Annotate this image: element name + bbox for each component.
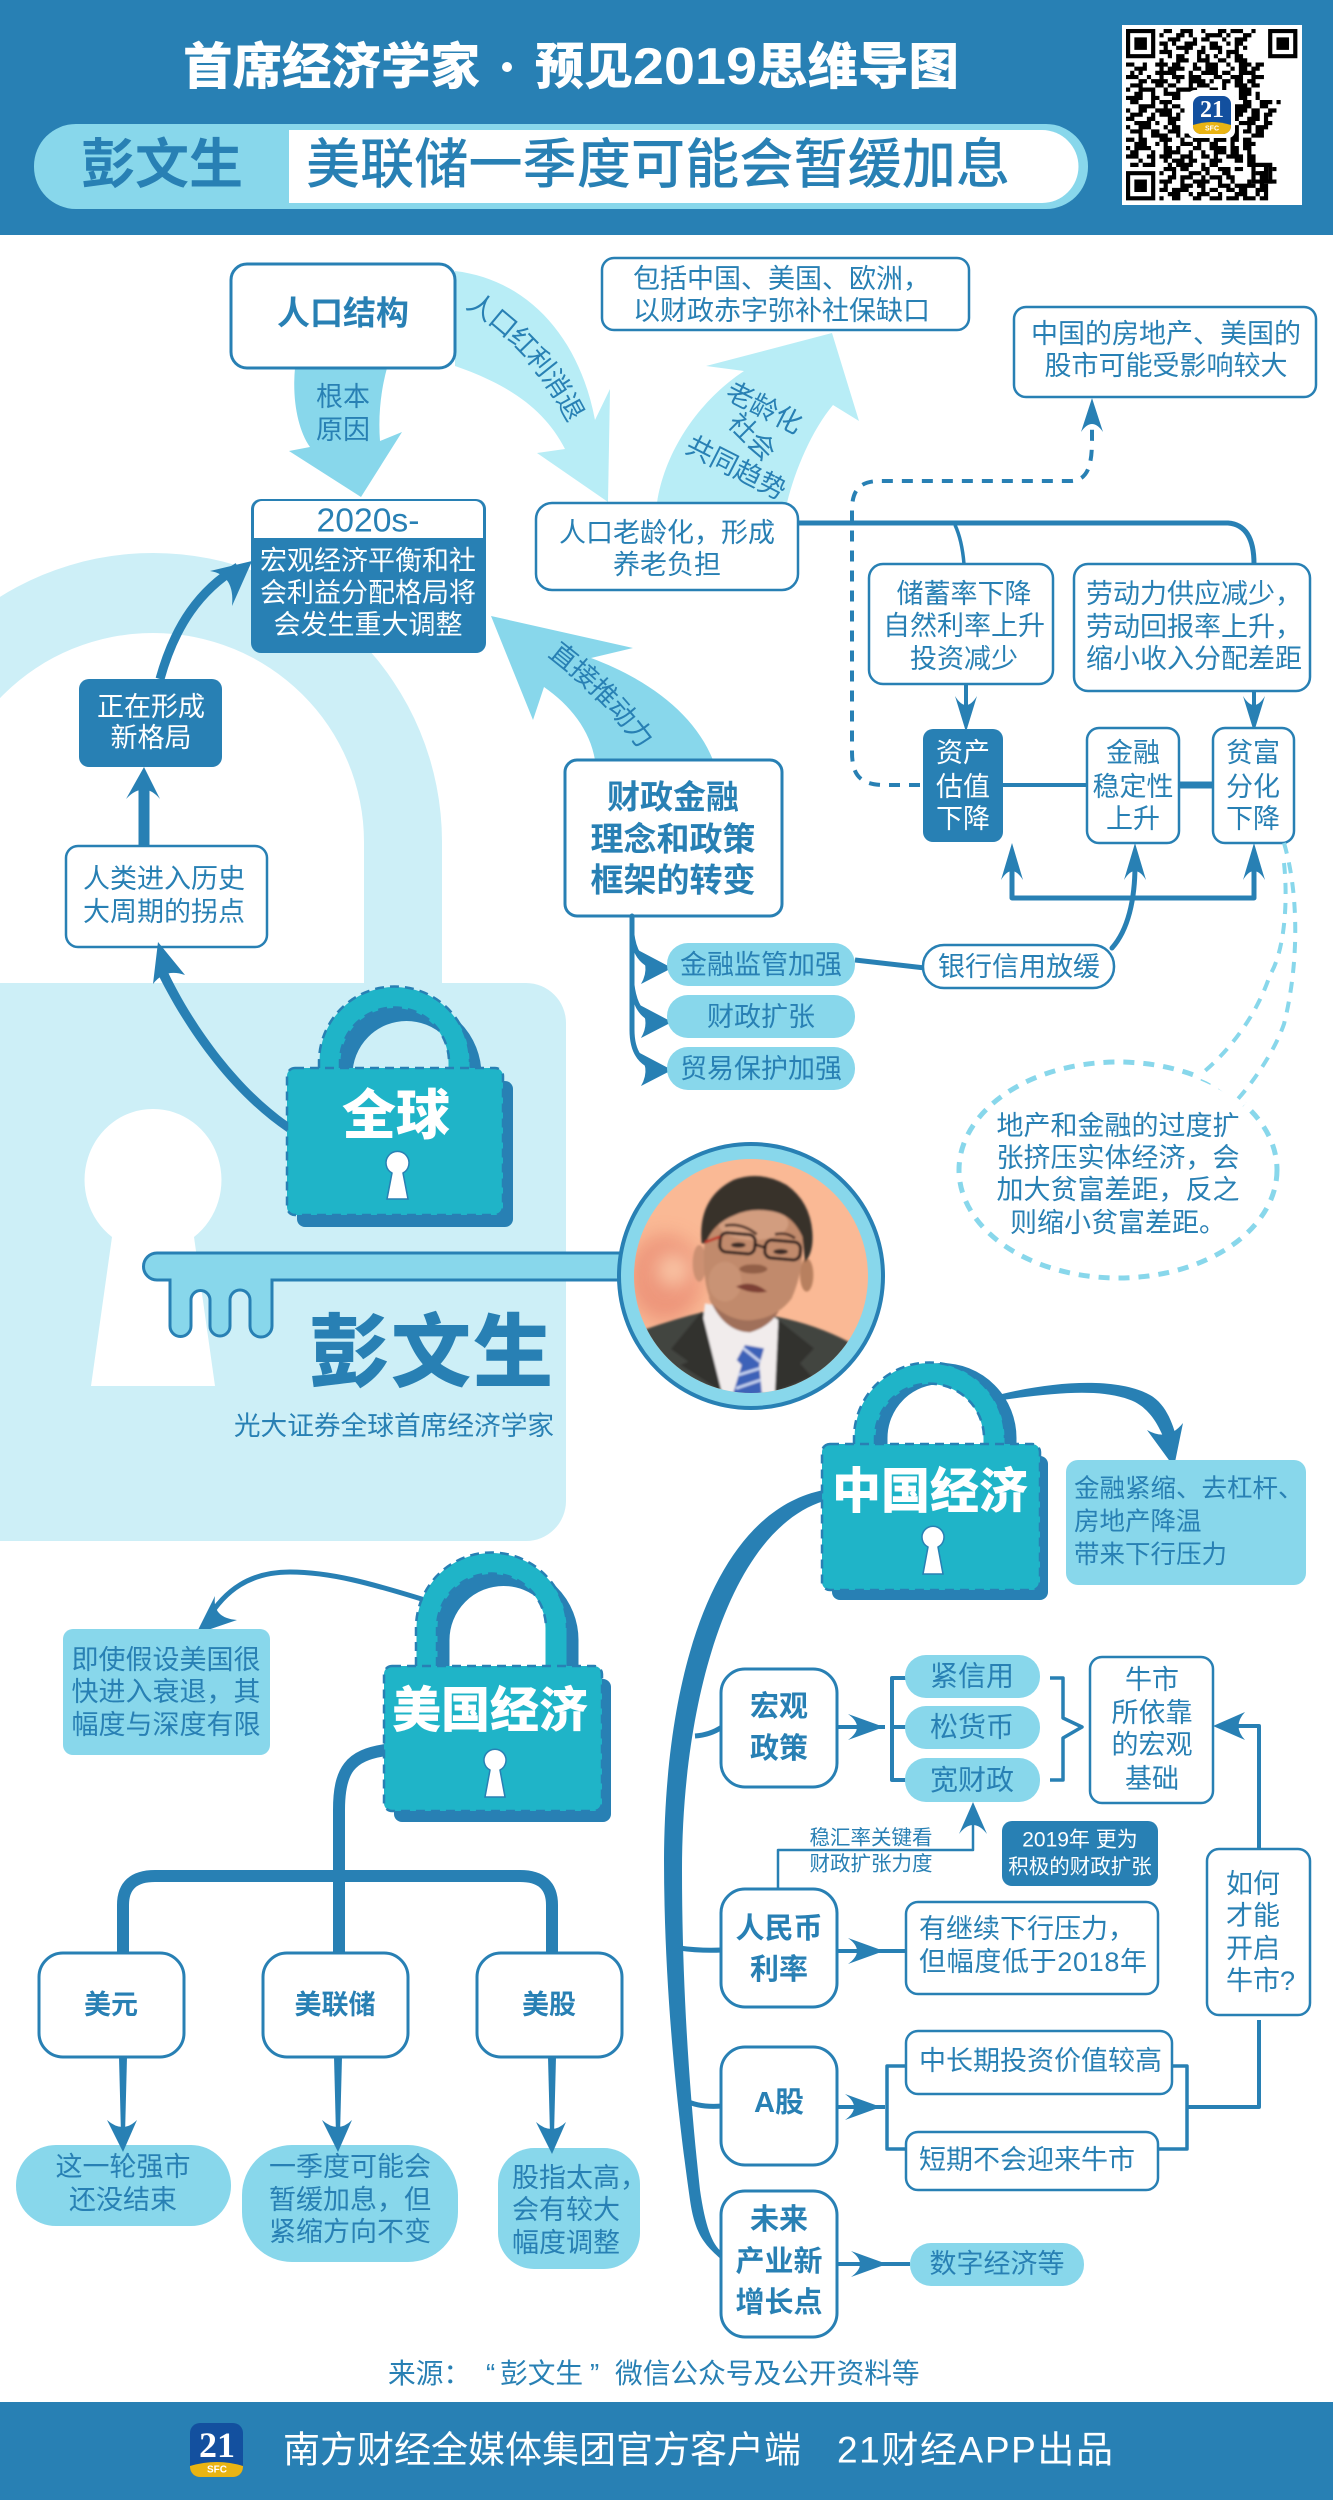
box: macro policy xyxy=(721,1669,837,1787)
box: continued pressure: 有继续下行压力， xyxy=(919,1914,1135,1944)
China trunk curve xyxy=(664,1490,824,2260)
box: population ageing: 人口老龄化，形成 xyxy=(559,518,775,548)
pill: tight credit: 紧信用 xyxy=(930,1660,1014,1692)
box: how to start bull market: 才能 xyxy=(1226,1901,1280,1931)
box: forming new pattern: 新格局 xyxy=(110,723,192,753)
background giant padlock xyxy=(0,553,566,1541)
box: 2019 more active fiscal: 2019年 更为 xyxy=(1022,1828,1138,1852)
source line: 彭文生 xyxy=(500,2358,583,2388)
dashed arrow to housing/stock note xyxy=(852,398,1103,785)
arrows: US boxes to conclusions xyxy=(107,2057,566,2154)
box: macro policy: 宏观 xyxy=(750,1690,808,1723)
policy tree xyxy=(632,916,672,1086)
pill: fiscal expansion: 财政扩张 xyxy=(707,1002,815,1032)
arrow label: ageing common trend xyxy=(681,376,807,506)
box: US dollar: 美元 xyxy=(84,1990,138,2020)
box: future growth: 未来 xyxy=(750,2203,808,2236)
source line: 来源： xyxy=(388,2358,471,2388)
box: China housing, US stocks: 中国的房地产、美国的 xyxy=(1031,319,1301,349)
box: no bull market short term: 短期不会迎来牛市 xyxy=(919,2145,1135,2175)
box: bull market basis xyxy=(1090,1657,1213,1803)
pill: dollar strength xyxy=(16,2145,231,2226)
box: US stocks: 美股 xyxy=(522,1990,576,2020)
box: recession note xyxy=(63,1629,270,1755)
links between outcome boxes xyxy=(1003,783,1213,787)
title xyxy=(183,38,959,96)
arrow: China lock to pressure note xyxy=(1002,1383,1183,1467)
dashed callout: property and finance: 则缩小贫富差距。 xyxy=(1010,1208,1226,1238)
headline pill: 美联储一季度可能会暂缓加息 xyxy=(306,135,1010,195)
box: includes China, US, Europe xyxy=(602,258,969,330)
box: 2020s: 2020s- xyxy=(316,502,420,538)
arrow: demographic dividend fades xyxy=(455,271,610,502)
box: 2019 more active fiscal: 积极的财政扩张 xyxy=(1008,1856,1152,1878)
box: fiscal and financial policy shift: 理念和政策 xyxy=(590,820,756,858)
box: savings rate xyxy=(869,564,1053,684)
pill: dollar strength: 还没结束 xyxy=(69,2185,177,2215)
name: Peng Wensheng: 彭文生 xyxy=(309,1308,553,1398)
box: wealth gap falls: 分化 xyxy=(1226,772,1280,802)
box: financial stability rises: 金融 xyxy=(1106,738,1160,768)
box: bull market basis: 基础 xyxy=(1125,1764,1179,1794)
arrow: global lock to turning point xyxy=(153,942,288,1132)
arrow label: ageing common trend: 社会 xyxy=(722,407,782,467)
box: RMB and rates: 利率 xyxy=(750,1953,808,1986)
job title: 光大证券全球首席经济学家 xyxy=(234,1411,554,1441)
box: asset valuation falls: 估值 xyxy=(936,772,990,802)
pill: tight credit xyxy=(905,1655,1040,1698)
box: wealth gap falls xyxy=(1213,728,1294,843)
box: long-term value xyxy=(906,2031,1172,2094)
box: turning point: 人类进入历史 xyxy=(83,864,245,894)
keyhole xyxy=(386,1151,409,1199)
box: future growth: 增长点 xyxy=(735,2286,823,2319)
box: forming new pattern: 正在形成 xyxy=(97,692,205,722)
arrow label: root cause xyxy=(316,382,370,445)
box: financial stability rises xyxy=(1087,728,1179,843)
box: wealth gap falls: 下降 xyxy=(1226,804,1280,834)
arrow: savings to asset valuation xyxy=(955,684,977,732)
pill: loose money: 松货币 xyxy=(930,1712,1014,1742)
footer logo: 21 xyxy=(199,2425,235,2465)
box: fiscal and financial policy shift: 财政金融 xyxy=(607,778,739,816)
box: bull market basis: 的宏观 xyxy=(1112,1730,1192,1760)
box: asset valuation falls: 资产 xyxy=(936,738,990,768)
box: RMB and rates: 人民币 xyxy=(735,1913,823,1945)
arrow: how to start bull market xyxy=(1187,1712,1259,2107)
title: 首席经济学家 xyxy=(183,39,480,95)
box: labour supply xyxy=(1074,564,1310,691)
arrow: ageing common trend xyxy=(657,333,859,506)
QR code xyxy=(1122,25,1302,205)
pill: US stocks high: 幅度调整 xyxy=(512,2228,620,2258)
padlock: China economy xyxy=(822,1362,1048,1600)
name: Peng Wensheng xyxy=(234,1308,554,1441)
lock label: US economy: 美国经济 xyxy=(392,1684,588,1738)
box: turning point xyxy=(66,846,267,947)
QR centre logo: SFC xyxy=(1205,126,1219,132)
exchange rate note xyxy=(810,1826,932,1876)
box: downward pressure note: 带来下行压力 xyxy=(1074,1541,1227,1569)
box: 2020s: 会发生重大调整 xyxy=(274,610,462,640)
headline pill: 彭文生 xyxy=(81,135,243,195)
pill: Fed pause xyxy=(242,2145,458,2262)
pill: trade protection xyxy=(667,1047,855,1090)
key xyxy=(144,1253,632,1337)
box: 2020s xyxy=(251,499,486,653)
box: bull market basis: 牛市 xyxy=(1125,1665,1179,1695)
QR centre logo: 21 xyxy=(1200,97,1224,123)
header band xyxy=(0,0,1333,235)
box: population structure xyxy=(231,264,455,368)
dashed callout: property and finance: 地产和金融的过度扩 xyxy=(996,1111,1240,1141)
box: macro policy: 政策 xyxy=(750,1732,808,1765)
connector lines from ageing box xyxy=(798,523,1254,564)
arrow: 2020s from new pattern xyxy=(160,561,252,679)
right brace xyxy=(1050,1678,1082,1780)
box: US stocks xyxy=(477,1953,622,2057)
lock label: China economy: 中国经济 xyxy=(832,1465,1028,1519)
exchange rate note: 财政扩张力度 xyxy=(810,1852,932,1876)
box: 2019 more active fiscal xyxy=(1002,1821,1158,1886)
box: population structure: 人口结构 xyxy=(277,294,409,332)
box: Fed xyxy=(263,1953,408,2057)
box: how to start bull market: 开启 xyxy=(1226,1934,1280,1964)
pill: US stocks high xyxy=(498,2148,647,2269)
box: population ageing: 养老负担 xyxy=(613,550,721,580)
arrow label: root cause: 原因 xyxy=(316,415,370,445)
China trunk branches xyxy=(679,1727,722,2106)
box: continued pressure: 但幅度低于2018年 xyxy=(919,1947,1147,1977)
box: long-term value: 中长期投资价值较高 xyxy=(919,2046,1162,2076)
pill: fiscal expansion xyxy=(667,995,855,1038)
box: forming new pattern xyxy=(79,679,222,767)
arrow label: ageing common trend: 共同趋势 xyxy=(681,430,791,506)
footer logo xyxy=(190,2423,243,2477)
box: recession note: 即使假设美国很 xyxy=(72,1645,260,1675)
dashed callout: property and finance xyxy=(959,843,1295,1278)
box: China housing, US stocks xyxy=(1014,307,1316,397)
box: financial stability rises: 稳定性 xyxy=(1092,772,1174,802)
footer text: 南方财经全媒体集团官方客户端 xyxy=(283,2430,801,2470)
box: 2020s: 会利益分配格局将 xyxy=(260,578,476,608)
box: future growth: 产业新 xyxy=(735,2245,823,2278)
arrow: direct driver: 直接推动力 xyxy=(548,641,652,746)
portrait photo xyxy=(617,1142,885,1410)
pill: Fed pause: 紧缩方向不变 xyxy=(269,2217,431,2247)
box: how to start bull market: 如何 xyxy=(1226,1869,1280,1899)
box: wealth gap falls: 贫富 xyxy=(1226,738,1280,768)
box: includes China, US, Europe: 包括中国、美国、欧洲， xyxy=(633,264,930,294)
box: population ageing xyxy=(536,503,798,590)
pill: dollar strength: 这一轮强市 xyxy=(56,2152,190,2182)
box: bull market basis: 所依靠 xyxy=(1112,1698,1192,1728)
box: turning point: 大周期的拐点 xyxy=(83,897,245,927)
box: how to start bull market: 牛市? xyxy=(1226,1966,1295,1996)
box: downward pressure note xyxy=(1066,1460,1306,1585)
pill: tighter financial regulation xyxy=(667,943,855,986)
box: labour supply: 劳动回报率上升， xyxy=(1086,612,1302,642)
box: includes China, US, Europe: 以财政赤字弥补社保缺口 xyxy=(633,296,930,326)
pill: digital economy: 数字经济等 xyxy=(930,2249,1064,2279)
box: US dollar xyxy=(39,1953,184,2057)
arrow: new pattern from turning point xyxy=(126,767,160,846)
box: savings rate: 投资减少 xyxy=(910,644,1018,674)
arrow: demographic dividend fades: 人口红利消退 xyxy=(466,295,586,422)
box: asset valuation falls xyxy=(923,729,1003,842)
box: fiscal and financial policy shift: 框架的转变 xyxy=(590,862,756,898)
keyhole xyxy=(922,1526,944,1574)
exchange rate note: 稳汇率关键看 xyxy=(810,1826,932,1850)
arrow label: root cause: 根本 xyxy=(316,382,370,412)
box: savings rate: 自然利率上升 xyxy=(883,611,1045,641)
arrow: root cause xyxy=(289,368,402,497)
title: 思维导图 xyxy=(757,39,959,95)
footer band xyxy=(0,2402,1333,2500)
footer logo: SFC xyxy=(207,2464,227,2476)
box: RMB and rates xyxy=(721,1889,837,2007)
padlock: global xyxy=(287,986,513,1227)
box: recession note: 快进入衰退，其 xyxy=(72,1677,260,1707)
arrow and bracket: macro policy xyxy=(837,1678,906,1780)
pill: Fed pause: 暂缓加息，但 xyxy=(269,2185,431,2215)
box: labour supply: 缩小收入分配差距 xyxy=(1086,644,1302,674)
box: recession note: 幅度与深度有限 xyxy=(72,1710,260,1740)
title: 2019 xyxy=(633,38,757,96)
pill: US stocks high: 会有较大 xyxy=(512,2195,620,2225)
arrow and brackets: A shares xyxy=(837,2066,1187,2149)
headline pill xyxy=(34,124,1088,209)
line: regulation to bank credit xyxy=(855,960,925,968)
box: labour supply: 劳动力供应减少， xyxy=(1086,579,1302,609)
arrow: exchange rate to fiscal xyxy=(778,1802,987,1889)
arrow: labour to wealth gap xyxy=(1243,691,1265,732)
box: A shares: A股 xyxy=(754,2087,804,2119)
pill: loose fiscal: 宽财政 xyxy=(930,1764,1014,1796)
box: continued pressure xyxy=(906,1902,1158,1994)
box: savings rate: 储蓄率下降 xyxy=(896,579,1032,609)
pill: US stocks high: 股指太高， xyxy=(512,2163,647,2193)
box: Fed: 美联储 xyxy=(294,1990,376,2020)
QR centre logo xyxy=(1188,90,1235,138)
pill: tighter financial regulation: 金融监管加强 xyxy=(680,950,842,980)
feedback arrows under outcome boxes xyxy=(1001,843,1265,948)
pill: Fed pause: 一季度可能会 xyxy=(269,2152,431,2182)
box: A shares xyxy=(721,2047,837,2165)
box: 2020s: 宏观经济平衡和社 xyxy=(260,546,476,576)
arrow: US lock to recession note xyxy=(196,1572,428,1634)
US tree connectors xyxy=(123,1750,552,1953)
pill: loose money xyxy=(905,1706,1040,1749)
source line: 微信公众号及公开资料等 xyxy=(615,2358,920,2388)
source line: “ xyxy=(486,2358,495,2388)
box: downward pressure note: 房地产降温 xyxy=(1074,1508,1202,1536)
pill: bank credit slows: 银行信用放缓 xyxy=(938,952,1100,982)
lock label: global: 全球 xyxy=(342,1086,450,1146)
title: 预见 xyxy=(535,39,633,95)
dashed callout: property and finance: 加大贫富差距，反之 xyxy=(996,1175,1240,1205)
keyhole xyxy=(484,1749,506,1797)
pill: trade protection: 贸易保护加强 xyxy=(680,1054,842,1084)
arrow: future growth xyxy=(837,2251,910,2277)
footer band: 21财经APP出品 xyxy=(837,2430,1113,2470)
box: no bull market short term xyxy=(906,2132,1158,2190)
arrow label: ageing common trend: 老龄化 xyxy=(721,376,807,440)
box: China housing, US stocks: 股市可能受影响较大 xyxy=(1044,351,1288,381)
arrow: direct driver xyxy=(491,616,712,758)
dashed callout: property and finance: 张挤压实体经济，会 xyxy=(996,1143,1240,1173)
box: how to start bull market xyxy=(1207,1849,1310,2015)
pill: loose fiscal xyxy=(905,1758,1040,1802)
box: asset valuation falls: 下降 xyxy=(936,804,990,834)
pill: bank credit slows xyxy=(923,945,1114,988)
box: fiscal and financial policy shift xyxy=(565,760,782,916)
source line: ” xyxy=(590,2358,599,2388)
box: downward pressure note: 金融紧缩、去杠杆、 xyxy=(1074,1475,1304,1503)
box: future growth xyxy=(721,2191,837,2337)
box: financial stability rises: 上升 xyxy=(1106,804,1160,834)
padlock: US economy xyxy=(384,1552,611,1822)
arrow: RMB to pressure xyxy=(837,1938,906,1964)
pill: digital economy xyxy=(910,2243,1084,2286)
